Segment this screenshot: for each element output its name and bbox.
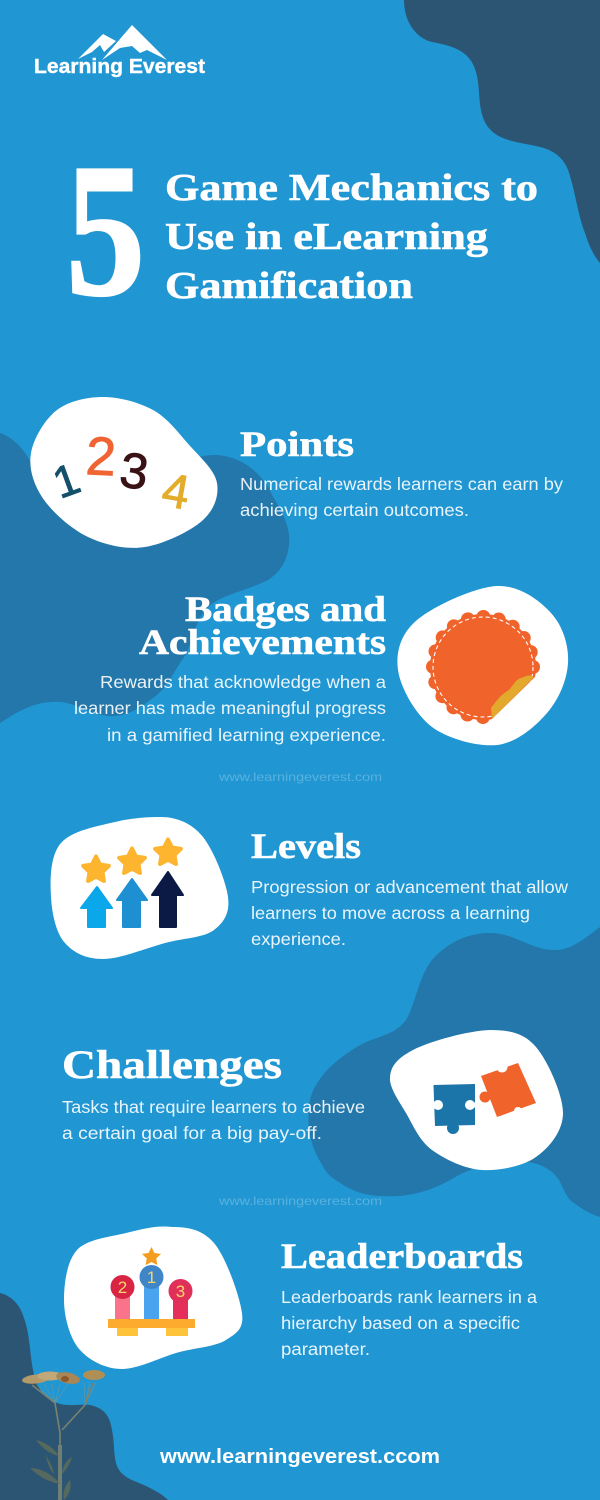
description: badges: in a gamified learning experience. [107, 725, 386, 745]
icon: numbers on white blob: 3 [116, 441, 152, 501]
panel: badges and achievements [74, 586, 568, 745]
title text: Gamification [165, 265, 413, 307]
icon: podium on white blob: 1 [147, 1268, 156, 1287]
footer url: www.learningeverest.ccom [159, 1446, 440, 1468]
heading: points: Points [240, 424, 354, 464]
description: points [240, 474, 563, 520]
icon: podium on white blob [64, 1226, 242, 1369]
logo wordmark: Learning Everest [34, 56, 205, 78]
background blob: bottom left [0, 1293, 168, 1500]
heading: badges and achievements: Achievements [139, 622, 386, 662]
description: leaderboards: Leaderboards rank learners in a [281, 1287, 537, 1307]
description: badges [74, 672, 386, 745]
description: challenges: a certain goal for a big pay-off. [62, 1123, 322, 1143]
heading: badges and achievements [139, 589, 386, 662]
icon: numbers on white blob [30, 397, 217, 548]
background blob: top right [404, 0, 600, 263]
watermark: www.learningeverest.com [218, 770, 382, 784]
background blob: left middle [0, 433, 289, 723]
icon: podium on white blob: 3 [176, 1282, 185, 1301]
description: leaderboards: hierarchy based on a specific [281, 1313, 520, 1333]
logo [34, 25, 205, 78]
description: badges: Rewards that acknowledge when a [100, 672, 386, 692]
icon: podium on white blob: 2 [118, 1278, 127, 1297]
icon: numbers on white blob: 4 [158, 464, 194, 520]
icon: numbers on white blob: 1 [47, 454, 86, 508]
icon: stars and arrows on white blob [51, 817, 228, 959]
description: levels: Progression or advancement that allow [251, 877, 568, 897]
panel: leaderboards [64, 1226, 537, 1369]
big number 5: 5 [66, 126, 145, 336]
title text: Game Mechanics to [165, 167, 538, 209]
icon: numbers on white blob: 2 [84, 426, 118, 488]
panel: points [30, 397, 563, 548]
title text: Use in eLearning [165, 216, 488, 258]
heading: leaderboards: Leaderboards [281, 1236, 523, 1276]
plant illustration [22, 1370, 105, 1500]
description: points: Numerical rewards learners can earn by [240, 474, 563, 494]
watermark: www.learningeverest.com [218, 1194, 382, 1208]
description: levels: experience. [251, 929, 346, 949]
icon: puzzle pieces on white blob [390, 1030, 563, 1170]
title [66, 126, 538, 336]
description: leaderboards: parameter. [281, 1339, 370, 1359]
description: leaderboards [281, 1287, 537, 1359]
icon: mountains [78, 25, 167, 60]
description: badges: learner has made meaningful progress [74, 698, 386, 718]
description: levels [251, 877, 568, 949]
panel: challenges [62, 1030, 563, 1170]
description: levels: learners to move across a learning [251, 903, 530, 923]
heading: badges and achievements: Badges and [185, 589, 386, 629]
panel: levels [51, 817, 568, 959]
description: challenges [62, 1097, 365, 1143]
heading: challenges: Challenges [62, 1042, 282, 1087]
description: points: achieving certain outcomes. [240, 500, 469, 520]
background blob: right lower [308, 927, 600, 1217]
icon: badge sticker on white blob [397, 586, 568, 745]
description: challenges: Tasks that require learners to achieve [62, 1097, 365, 1117]
heading: levels: Levels [251, 826, 361, 866]
title text [165, 167, 538, 307]
